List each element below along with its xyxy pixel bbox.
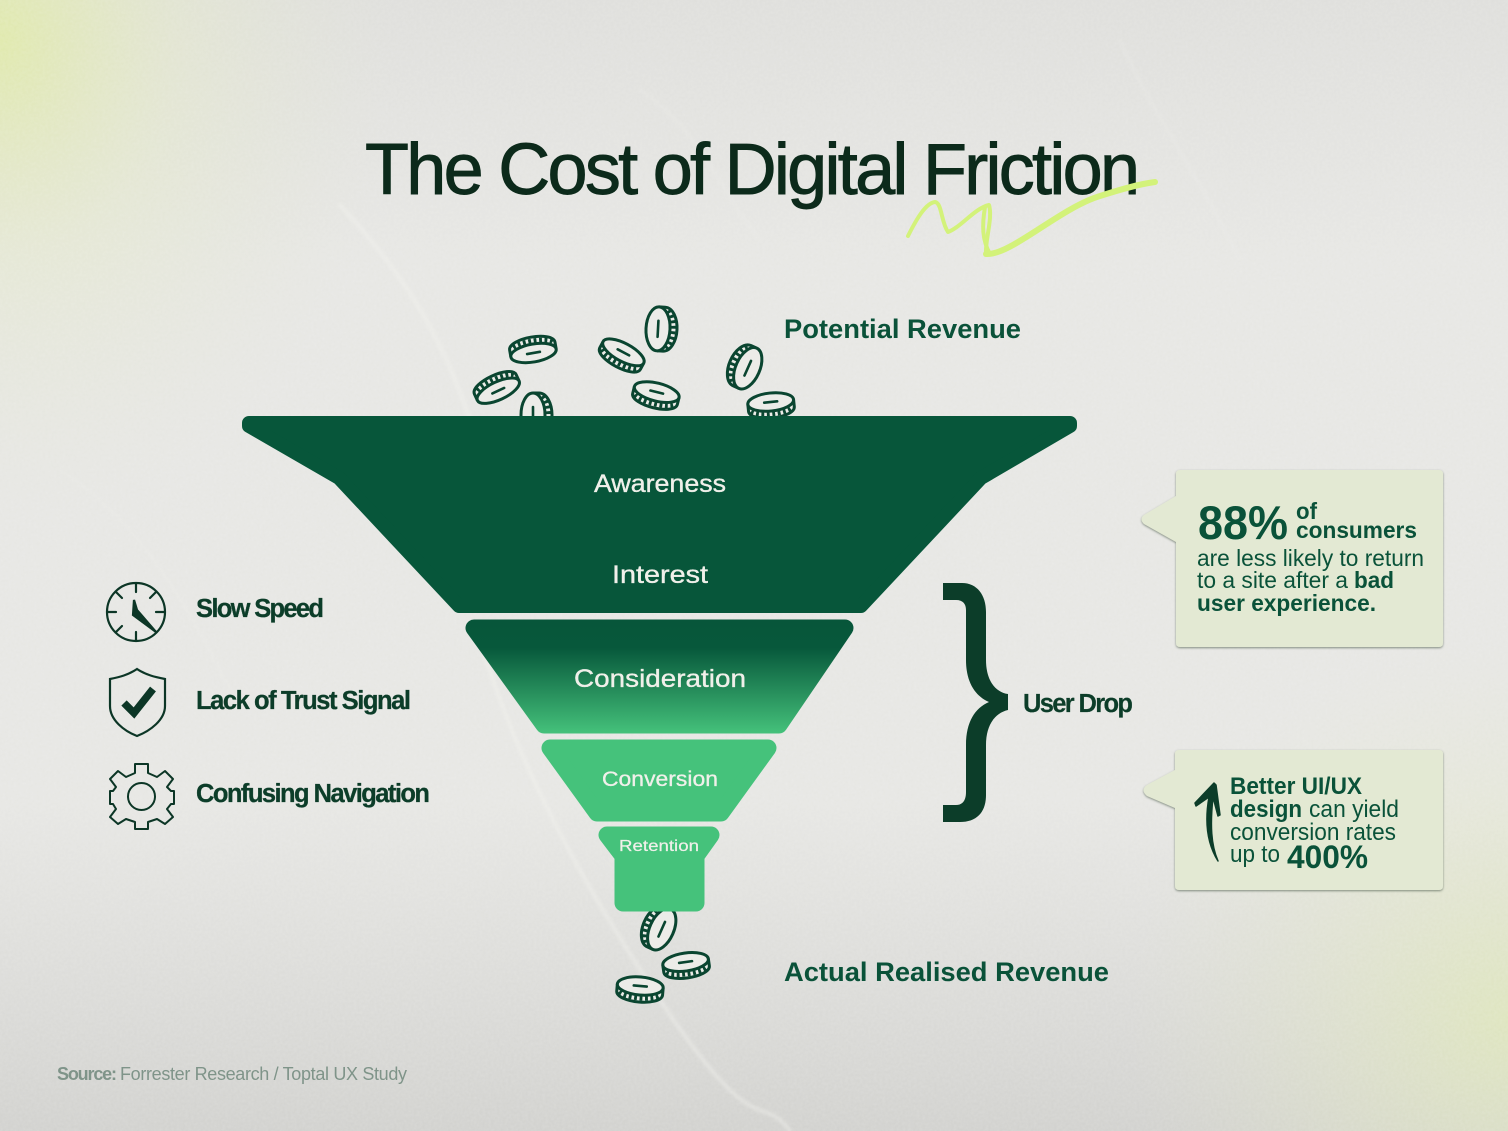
label: user drop: User Drop xyxy=(1023,690,1133,718)
callout: 88% of consumers: are less likely to return xyxy=(1197,545,1424,571)
funnel stage: awareness and interest xyxy=(249,423,1070,606)
callout: better UI/UX design: up to xyxy=(1230,841,1280,868)
callout: 88% of consumers: 88% xyxy=(1198,496,1288,549)
callout: better UI/UX design: design xyxy=(1230,796,1302,823)
friction factor: confusing navigation xyxy=(110,764,430,829)
funnel stage: awareness and interest: Awareness xyxy=(594,470,726,498)
funnel stage: consideration: Consideration xyxy=(574,665,746,693)
callout: 88% of consumers: to a site after a xyxy=(1197,567,1348,593)
title squiggle underline xyxy=(908,182,1155,254)
callout: 88% of consumers xyxy=(1142,470,1443,647)
icon: hand-drawn up arrow xyxy=(1195,783,1220,861)
callout: 88% of consumers: bad xyxy=(1354,567,1394,593)
funnel stage: awareness and interest: Interest xyxy=(612,561,708,589)
icon: shield with check xyxy=(110,669,165,736)
callout: better UI/UX design: conversion rates xyxy=(1230,819,1396,846)
source note: Forrester Research / Toptal UX Study xyxy=(120,1064,407,1084)
friction factor: lack of trust signal xyxy=(110,669,411,736)
brace: user drop xyxy=(943,583,1008,822)
friction factor: lack of trust signal: Lack of Trust Signal xyxy=(196,687,411,715)
icon: clock xyxy=(107,583,165,641)
callout: better UI/UX design: Better UI/UX xyxy=(1230,773,1362,800)
source note: Source: xyxy=(57,1064,117,1084)
funnel stage: consideration xyxy=(474,628,845,725)
callout: 88% of consumers: of xyxy=(1296,498,1317,524)
funnel xyxy=(249,423,1070,903)
callout: 88% of consumers: user experience. xyxy=(1197,590,1376,616)
callout: better UI/UX design: 400% xyxy=(1287,839,1368,875)
callout: 88% of consumers: consumers xyxy=(1296,517,1417,543)
friction factor: confusing navigation: Confusing Navigation xyxy=(196,780,430,808)
coins: potential revenue entering funnel xyxy=(471,306,795,437)
funnel stage: retention xyxy=(607,835,711,903)
callout: better UI/UX design xyxy=(1144,750,1443,890)
friction factor: slow speed xyxy=(107,583,324,641)
title: The Cost of Digital Friction xyxy=(365,130,1140,210)
icon: gear xyxy=(110,764,174,829)
funnel stage: retention: Retention xyxy=(619,838,699,855)
label: actual realised revenue: Actual Realised Revenue xyxy=(784,957,1109,987)
friction factor: slow speed: Slow Speed xyxy=(196,595,324,623)
funnel stage: conversion xyxy=(550,748,768,813)
label: potential revenue: Potential Revenue xyxy=(784,314,1021,344)
callout: better UI/UX design: can yield xyxy=(1309,796,1399,823)
coins: actual revenue leaving funnel xyxy=(616,901,711,1004)
funnel stage: conversion: Conversion xyxy=(602,768,718,791)
